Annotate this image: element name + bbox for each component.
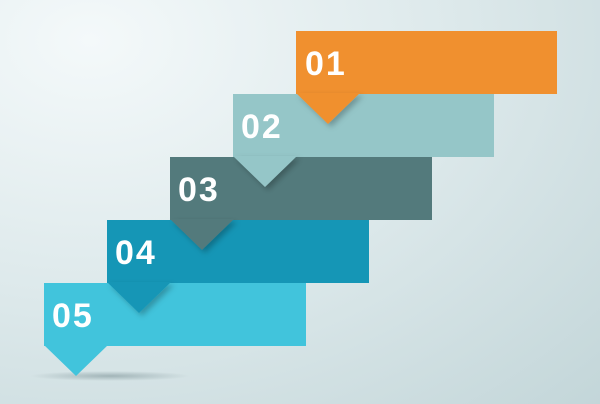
step 04 — [107, 220, 369, 313]
step 01 — [296, 31, 557, 124]
step 05: 05 — [52, 297, 94, 335]
step 03: 03 — [178, 171, 220, 209]
step 01: 01 — [305, 45, 347, 83]
step 03 — [170, 157, 432, 250]
step 02: 02 — [241, 108, 283, 146]
floor shadow — [30, 371, 190, 381]
step 02 — [233, 94, 494, 187]
step 05 — [44, 283, 306, 376]
step 04: 04 — [115, 234, 157, 272]
